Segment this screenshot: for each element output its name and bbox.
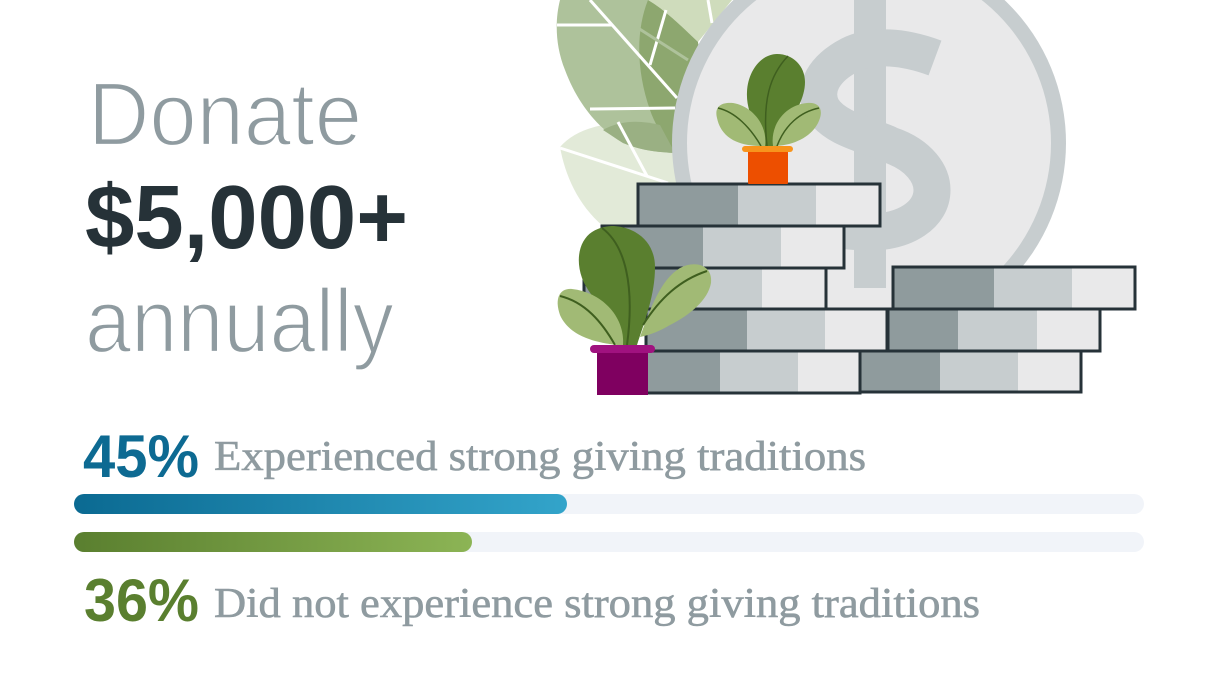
label: experienced strong giving traditions: Experienced strong giving traditions — [214, 434, 866, 480]
bill row 3 — [584, 268, 826, 309]
darker leaf overlap — [639, 0, 700, 153]
bill row 5 — [618, 351, 860, 393]
left leaf vein — [560, 296, 615, 345]
bill row 4 — [646, 309, 887, 351]
heading: Donate $5,000+ annually — [85, 65, 408, 372]
right leaf — [640, 264, 711, 337]
light upper leaf — [648, 0, 732, 42]
bar track — [74, 532, 1144, 552]
pot rim — [742, 146, 793, 152]
heading line: annually: annually — [85, 272, 394, 372]
right bill top — [893, 267, 1135, 309]
value: 36%: 36% — [84, 567, 199, 634]
purple pot — [597, 350, 648, 395]
large sage leaf — [557, 0, 700, 153]
icon: large plant in purple pot — [558, 226, 711, 395]
pale lower leaf — [560, 122, 690, 226]
central leaf vein — [602, 228, 630, 345]
value: 45%: 45% — [83, 423, 199, 490]
orange pot — [748, 150, 788, 184]
pot rim — [590, 345, 655, 353]
heading line: amount: $5,000+ — [85, 168, 408, 268]
illustration: background leaves — [557, 0, 732, 226]
right leaf vein — [777, 108, 819, 146]
right leaf — [773, 103, 821, 146]
statistic: 36 percent — [84, 567, 980, 634]
central leaf — [579, 226, 655, 345]
progress bar: 45 percent — [74, 494, 1144, 514]
coin face — [687, 0, 1051, 325]
central leaf — [747, 54, 805, 146]
bill row 1 — [638, 184, 880, 226]
icon: small plant in orange pot — [716, 54, 821, 184]
right leaf vein — [643, 271, 707, 325]
left leaf — [716, 103, 765, 146]
illustration: left stack of bills — [584, 184, 887, 393]
lower leaf overlap — [603, 122, 675, 153]
leaf veins — [557, 0, 712, 183]
central leaf vein — [766, 56, 788, 146]
bar track — [74, 494, 1144, 514]
left leaf vein — [718, 108, 761, 146]
left leaf — [558, 289, 623, 345]
progress bar: 36 percent — [74, 532, 1144, 552]
bar fill — [74, 532, 472, 552]
heading line: Donate: Donate — [88, 65, 362, 165]
label: did not experience strong giving traditions: Did not experience strong giving traditions — [214, 581, 980, 627]
right bill bottom — [860, 351, 1081, 393]
right bill middle — [888, 309, 1100, 351]
illustration: right stack of bills — [860, 267, 1135, 393]
icon: dollar coin — [672, 0, 1066, 340]
bar fill — [74, 494, 567, 514]
coin rim — [672, 0, 1066, 340]
bill row 2 — [602, 226, 844, 268]
dollar sign — [790, 0, 935, 288]
statistic: 45 percent — [83, 423, 866, 490]
